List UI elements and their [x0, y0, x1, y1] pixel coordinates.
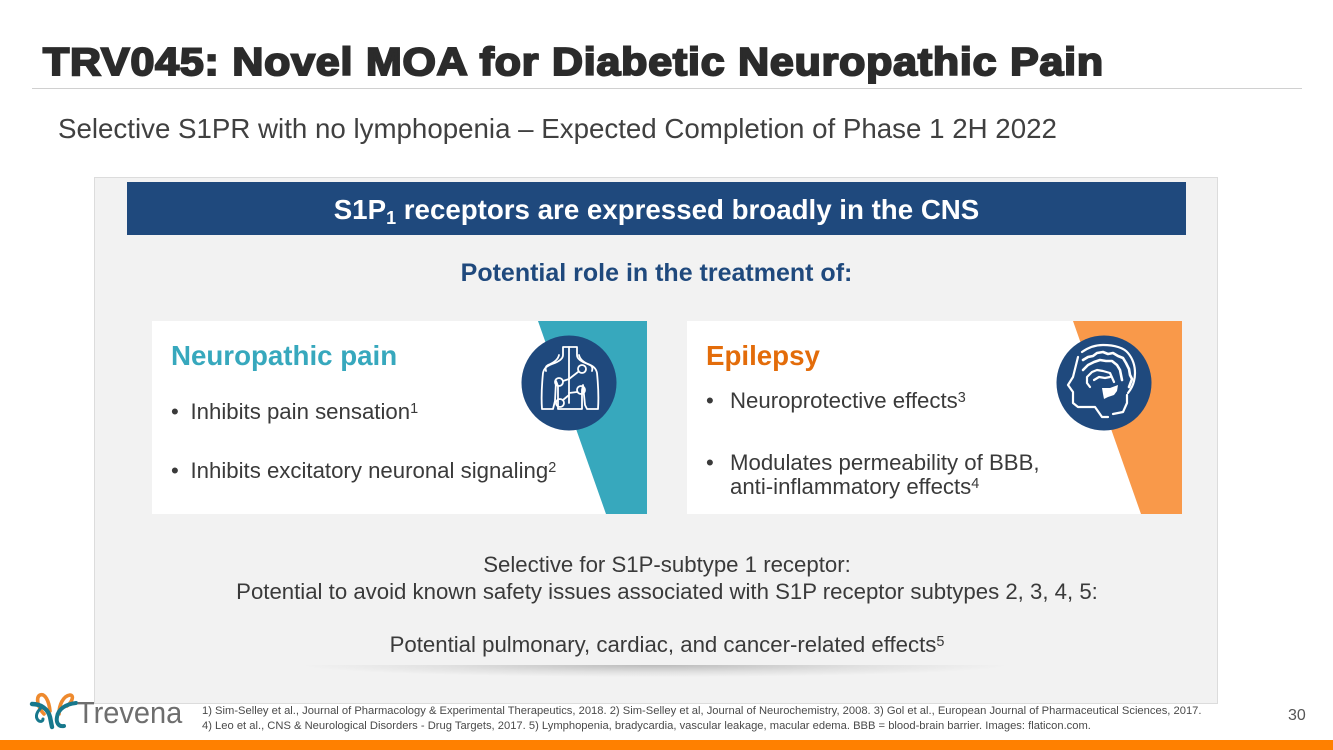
icon: torso with nerve nodes — [522, 336, 616, 430]
text: selectivity statement — [236, 552, 1098, 604]
bullet: modulates permeability — [706, 450, 1040, 499]
card: epilepsy — [687, 321, 1182, 514]
title: TRV045: Novel MOA for Diabetic Neuropathic Pain — [43, 41, 1104, 84]
panel: main content — [94, 177, 1218, 704]
text: selectivity statement: Selective for S1P-subtype 1 receptor: — [483, 552, 851, 577]
bullet: modulates permeability: anti-inflammatory effects4 — [730, 474, 979, 499]
bullet: inhibits pain sensation: Inhibits pain sensation1 — [190, 399, 418, 424]
logo mark — [30, 692, 78, 730]
page number: 30 — [1288, 707, 1306, 724]
bullet: neuroprotective effects: • — [706, 388, 714, 413]
banner: S1P1 receptors — [127, 182, 1186, 235]
card accent: teal wedge — [538, 321, 647, 514]
card heading: epilepsy: Epilepsy — [706, 340, 820, 371]
icon: head with brain — [1056, 336, 1152, 430]
banner: S1P1 receptors: S1P1 receptors are expressed broadly in the CNS — [334, 194, 979, 228]
card: neuropathic pain — [152, 321, 647, 514]
bullet: modulates permeability: • — [706, 450, 714, 475]
card heading: neuropathic pain: Neuropathic pain — [171, 340, 397, 371]
card accent: orange wedge — [1073, 321, 1182, 514]
bullet: neuroprotective effects: Neuroprotective effects3 — [730, 388, 966, 413]
bullet: inhibits excitatory signaling: • — [171, 458, 179, 483]
text: selectivity statement: Potential to avoid known safety issues associated with S1P receptor subtypes 2, 3, 4, 5: — [236, 578, 1098, 604]
footer bar — [0, 740, 1333, 750]
subtitle: Selective S1PR with no lymphopenia – Expected Completion of Phase 1 2H 2022 — [58, 113, 1057, 144]
bullet: modulates permeability: Modulates permeability of BBB, — [730, 450, 1040, 475]
logo wordmark: Trevena — [77, 696, 182, 730]
footnotes: 4) Leo et al., CNS & Neurological Disorders - Drug Targets, 2017. 5) Lymphopenia, bradycardia, vascular leakage, macular edema. BBB = blood-brain barrier. Images: flaticon.com. — [202, 720, 1091, 732]
bullet: inhibits excitatory signaling: Inhibits excitatory neuronal signaling2 — [190, 458, 556, 483]
text: potential effects: Potential pulmonary, cardiac, and cancer-related effects5 — [390, 632, 944, 657]
logo: Trevena — [30, 692, 182, 730]
footnotes — [202, 705, 1202, 732]
heading: potential role: Potential role in the treatment of: — [461, 259, 852, 287]
bullet: inhibits pain sensation: • — [171, 399, 179, 424]
footnotes: 1) Sim-Selley et al., Journal of Pharmacology & Experimental Therapeutics, 2018. 2) Sim-Selley et al, Journal of Neurochemistry, 2008. 3) Gol et al., European Journal of Pharmaceutical Sciences, 2017. — [202, 705, 1202, 717]
